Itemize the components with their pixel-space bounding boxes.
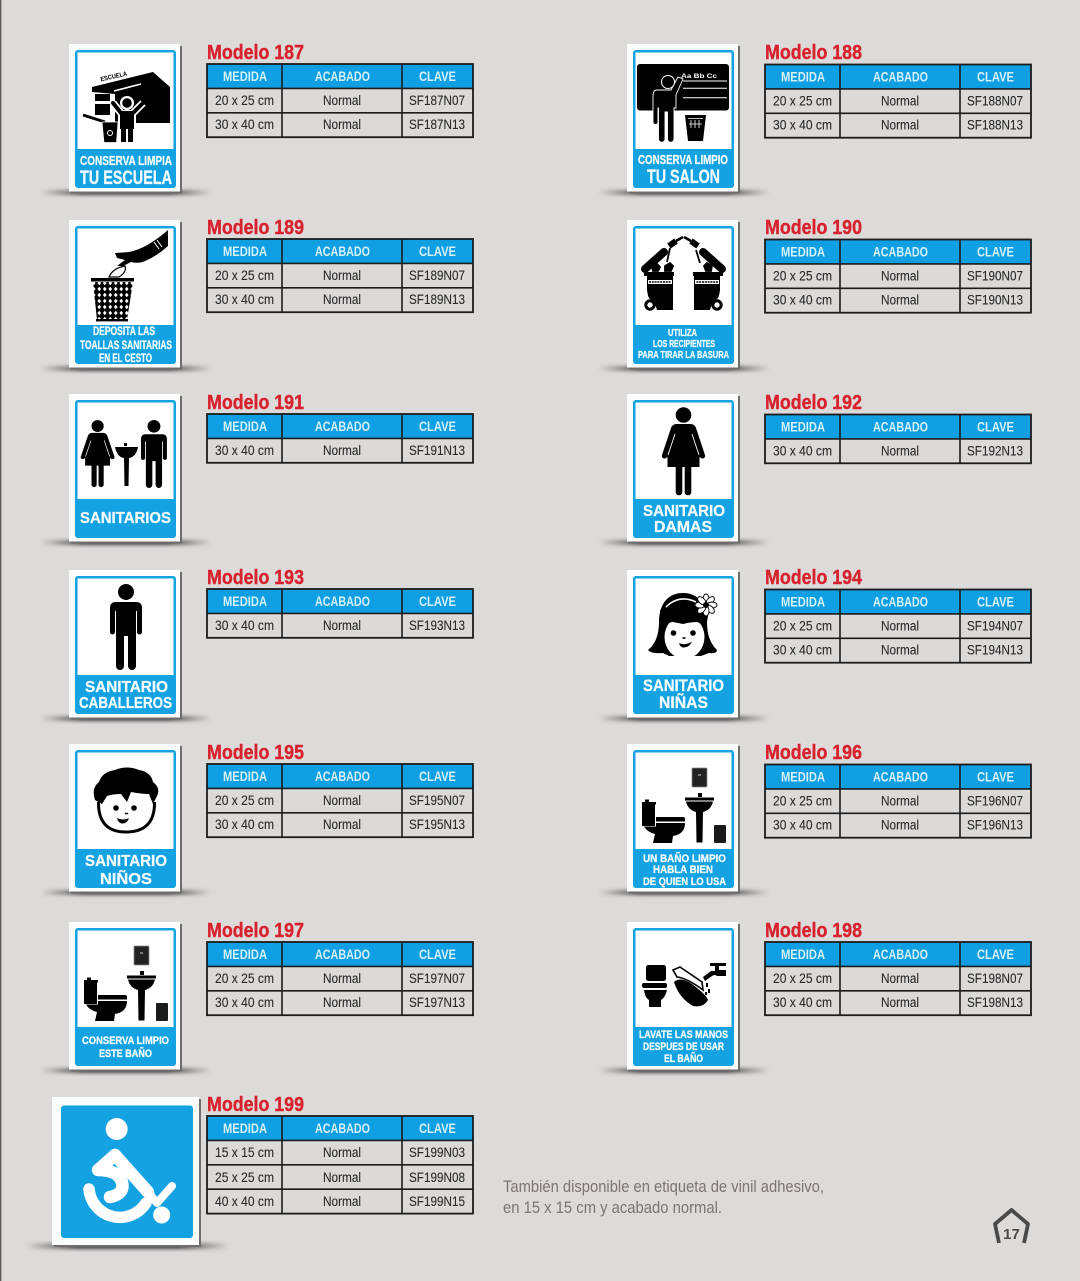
sign: sanitario caballeros: [40, 570, 212, 721]
table: modelo 190: MEDIDA: [781, 244, 825, 260]
table: modelo 193: 30 x 40 cm: [215, 618, 274, 633]
table: modelo 191: ACABADO: [315, 419, 370, 434]
heading: modelo 194: Modelo 194: [765, 567, 863, 589]
panel: modelo 192: [598, 392, 1031, 545]
table: modelo 193: Normal: [323, 618, 361, 633]
table: modelo 191: [207, 414, 473, 463]
icon: page number: [995, 1210, 1028, 1243]
table: modelo 196: 20 x 25 cm: [773, 794, 832, 808]
sign: un bano limpio: UN BAÑO LIMPIO: [643, 852, 726, 865]
table: modelo 194: 20 x 25 cm: [773, 618, 832, 634]
table: modelo 187: 20 x 25 cm: [215, 93, 274, 108]
table: modelo 197: 30 x 40 cm: [215, 995, 274, 1010]
table: modelo 187: ACABADO: [315, 69, 370, 84]
table: modelo 197: [207, 942, 473, 1015]
table: modelo 197: SF197N13: [409, 995, 465, 1010]
table: modelo 198: Normal: [881, 971, 919, 986]
sign: sanitario ninos: [40, 744, 212, 895]
table: modelo 187: CLAVE: [419, 69, 456, 84]
table: modelo 187: Normal: [323, 93, 361, 108]
heading: modelo 190: Modelo 190: [765, 217, 862, 239]
table: modelo 195: 30 x 40 cm: [215, 817, 274, 832]
table: modelo 199: SF199N15: [409, 1194, 465, 1209]
table: modelo 192: ACABADO: [873, 420, 928, 434]
table: modelo 195: Normal: [323, 817, 361, 832]
table: modelo 188: CLAVE: [977, 70, 1014, 84]
table: modelo 190: SF190N07: [967, 268, 1023, 284]
table: modelo 192: 30 x 40 cm: [773, 444, 832, 458]
table: modelo 199: 40 x 40 cm: [215, 1194, 274, 1209]
table: modelo 193: CLAVE: [419, 594, 456, 609]
sign: sanitario ninos: NIÑOS: [100, 868, 152, 888]
table: modelo 188: ACABADO: [873, 70, 928, 84]
table: modelo 199: [207, 1116, 473, 1214]
heading: modelo 188: Modelo 188: [765, 42, 862, 64]
table: modelo 187: 30 x 40 cm: [215, 117, 274, 132]
table: modelo 198: 20 x 25 cm: [773, 971, 832, 986]
sign: utiliza los recipientes: LOS RECIPIENTES: [653, 339, 715, 350]
table: modelo 198: CLAVE: [977, 947, 1014, 962]
table: modelo 192: [765, 414, 1031, 463]
table: modelo 196: MEDIDA: [781, 770, 825, 784]
sign: un bano limpio: [598, 744, 770, 895]
table: modelo 187: Normal: [323, 117, 361, 132]
sign: conserva limpia tu escuela: [40, 44, 212, 195]
table: modelo 189: SF189N07: [409, 268, 465, 283]
sign: lavate las manos: EL BAÑO: [664, 1052, 703, 1065]
sign: conserva limpia tu escuela: CONSERVA LIMPIA: [80, 153, 172, 168]
sign: sanitario ninas: NIÑAS: [659, 692, 708, 712]
table: modelo 189: Normal: [323, 268, 361, 283]
sign: sanitario damas: DAMAS: [654, 519, 712, 536]
sign: sanitario damas: [598, 394, 770, 545]
table: modelo 188: [765, 64, 1031, 138]
table: modelo 188: 30 x 40 cm: [773, 118, 832, 132]
heading: modelo 198: Modelo 198: [765, 920, 862, 942]
table: modelo 195: SF195N07: [409, 793, 465, 808]
table: modelo 195: CLAVE: [419, 769, 456, 784]
table: modelo 198: MEDIDA: [781, 947, 825, 962]
panel: modelo 189: [40, 217, 473, 371]
table: modelo 189: SF189N13: [409, 292, 465, 307]
sign: un bano limpio: HABLA BIEN: [653, 864, 713, 876]
table: modelo 191: Normal: [323, 443, 361, 458]
table: modelo 194: SF194N13: [967, 642, 1023, 658]
table: modelo 188: 20 x 25 cm: [773, 94, 832, 108]
table: modelo 187: MEDIDA: [223, 69, 267, 84]
sign: conserva limpio este bano: [40, 922, 212, 1073]
table: modelo 190: ACABADO: [873, 244, 928, 260]
sign: deposita las toallas sanitarias: EN EL CESTO: [99, 353, 152, 365]
table: modelo 191: SF191N13: [409, 443, 465, 458]
heading: modelo 193: Modelo 193: [207, 567, 304, 589]
sign: conserva limpia tu escuela: ESCUELA: [100, 70, 128, 83]
sign: sanitarios: SANITARIOS: [80, 510, 171, 527]
table: modelo 199: SF199N03: [409, 1145, 465, 1160]
table: modelo 188: MEDIDA: [781, 70, 825, 84]
sign: conserva limpio este bano: CONSERVA LIMPIO: [82, 1035, 169, 1047]
table: modelo 199: 25 x 25 cm: [215, 1170, 274, 1185]
table: modelo 198: SF198N13: [967, 995, 1023, 1010]
panel: modelo 197: [40, 920, 473, 1073]
sign: conserva limpia tu escuela: TU ESCUELA: [80, 168, 172, 189]
text block: vinyl label note: [503, 1177, 824, 1217]
panel: modelo 199: [25, 1094, 473, 1249]
heading: modelo 196: Modelo 196: [765, 742, 862, 764]
table: modelo 192: MEDIDA: [781, 420, 825, 434]
table: modelo 189: ACABADO: [315, 244, 370, 259]
table: modelo 190: Normal: [881, 268, 919, 284]
heading: modelo 197: Modelo 197: [207, 920, 304, 942]
sign: un bano limpio: DE QUIEN LO USA: [643, 876, 726, 888]
table: modelo 192: SF192N13: [967, 444, 1023, 458]
sign: conserva limpio tu salon: [598, 44, 770, 195]
table: modelo 194: Normal: [881, 642, 919, 658]
table: modelo 198: ACABADO: [873, 947, 928, 962]
table: modelo 194: MEDIDA: [781, 594, 825, 610]
table: modelo 189: 30 x 40 cm: [215, 292, 274, 307]
sign: conserva limpio tu salon: Aa Bb Cc: [681, 73, 717, 80]
sign: utiliza los recipientes: [598, 220, 770, 371]
table: modelo 189: MEDIDA: [223, 244, 267, 259]
table: modelo 193: [207, 589, 473, 638]
sign: deposita las toallas sanitarias: DEPOSITA LAS: [93, 326, 155, 338]
sign: conserva limpio tu salon: CONSERVA LIMPIO: [638, 152, 728, 167]
sign: sanitario ninas: SANITARIO: [643, 676, 724, 695]
table: modelo 190: 30 x 40 cm: [773, 292, 832, 308]
sign: conserva limpio este bano: ESTE BAÑO: [99, 1047, 152, 1060]
sign: sanitario caballeros: CABALLEROS: [79, 695, 172, 712]
table: modelo 197: 20 x 25 cm: [215, 971, 274, 986]
table: modelo 188: SF188N13: [967, 118, 1023, 132]
table: modelo 197: Normal: [323, 995, 361, 1010]
table: modelo 189: Normal: [323, 292, 361, 307]
sign: deposita las toallas sanitarias: TOALLAS SANITARIAS: [80, 340, 172, 352]
table: modelo 197: Normal: [323, 971, 361, 986]
heading: modelo 189: Modelo 189: [207, 217, 304, 239]
table: modelo 190: SF190N13: [967, 292, 1023, 308]
table: modelo 194: [765, 590, 1031, 663]
sign: sanitarios: [40, 394, 212, 545]
sign: sanitario caballeros: SANITARIO: [85, 679, 168, 696]
table: modelo 192: CLAVE: [977, 420, 1014, 434]
table: modelo 188: Normal: [881, 94, 919, 108]
table: modelo 197: SF197N07: [409, 971, 465, 986]
panel: modelo 187: [40, 42, 473, 195]
text block: vinyl label note: en 15 x 15 cm y acabado normal.: [503, 1198, 722, 1217]
table: modelo 188: SF188N07: [967, 94, 1023, 108]
table: modelo 187: [207, 64, 473, 137]
table: modelo 199: CLAVE: [419, 1121, 456, 1136]
table: modelo 189: [207, 239, 473, 312]
sign: sanitario damas: SANITARIO: [643, 503, 725, 520]
table: modelo 190: Normal: [881, 292, 919, 308]
table: modelo 191: MEDIDA: [223, 419, 267, 434]
panel: modelo 194: [598, 567, 1031, 721]
table: modelo 193: ACABADO: [315, 594, 370, 609]
table: modelo 189: 20 x 25 cm: [215, 268, 274, 283]
sign: lavate las manos: [598, 922, 770, 1073]
table: modelo 187: SF187N13: [409, 117, 465, 132]
panel: modelo 196: [598, 742, 1031, 895]
table: modelo 199: Normal: [323, 1194, 361, 1209]
table: modelo 197: CLAVE: [419, 947, 456, 962]
table: modelo 195: ACABADO: [315, 769, 370, 784]
table: modelo 189: CLAVE: [419, 244, 456, 259]
table: modelo 193: SF193N13: [409, 618, 465, 633]
table: modelo 191: 30 x 40 cm: [215, 443, 274, 458]
icon: page number: 17: [1003, 1226, 1020, 1243]
table: modelo 196: CLAVE: [977, 770, 1014, 784]
table: modelo 190: [765, 240, 1031, 313]
panel: modelo 193: [40, 567, 473, 721]
table: modelo 195: MEDIDA: [223, 769, 267, 784]
sign: deposita las toallas sanitarias: [40, 220, 212, 371]
table: modelo 194: ACABADO: [873, 594, 928, 610]
table: modelo 190: 20 x 25 cm: [773, 268, 832, 284]
heading: modelo 195: Modelo 195: [207, 742, 304, 764]
text block: vinyl label note: También disponible en etiqueta de vinil adhesivo,: [503, 1177, 824, 1196]
table: modelo 194: Normal: [881, 618, 919, 634]
table: modelo 195: Normal: [323, 793, 361, 808]
heading: modelo 199: Modelo 199: [207, 1094, 304, 1116]
heading: modelo 191: Modelo 191: [207, 392, 304, 414]
sign: sanitario ninos: SANITARIO: [85, 853, 167, 870]
table: modelo 196: Normal: [881, 794, 919, 808]
table: modelo 195: 20 x 25 cm: [215, 793, 274, 808]
table: modelo 196: 30 x 40 cm: [773, 818, 832, 832]
table: modelo 194: 30 x 40 cm: [773, 642, 832, 658]
table: modelo 192: Normal: [881, 444, 919, 458]
table: modelo 197: ACABADO: [315, 947, 370, 962]
table: modelo 199: MEDIDA: [223, 1121, 267, 1136]
sign: lavate las manos: LAVATE LAS MANOS: [639, 1029, 728, 1041]
table: modelo 198: [765, 942, 1031, 1015]
table: modelo 197: MEDIDA: [223, 947, 267, 962]
table: modelo 199: Normal: [323, 1145, 361, 1160]
table: modelo 195: SF195N13: [409, 817, 465, 832]
table: modelo 198: 30 x 40 cm: [773, 995, 832, 1010]
sign: sanitario ninas: [598, 570, 770, 721]
panel: modelo 191: [40, 392, 473, 545]
heading: modelo 192: Modelo 192: [765, 392, 862, 414]
table: modelo 199: Normal: [323, 1170, 361, 1185]
panel: modelo 188: [598, 42, 1031, 195]
table: modelo 196: [765, 764, 1031, 838]
table: modelo 199: SF199N08: [409, 1170, 465, 1185]
sign: utiliza los recipientes: UTILIZA: [668, 328, 697, 339]
heading: modelo 187: Modelo 187: [207, 42, 304, 64]
table: modelo 194: SF194N07: [967, 618, 1023, 634]
table: modelo 194: CLAVE: [977, 594, 1014, 610]
panel: modelo 198: [598, 920, 1031, 1073]
table: modelo 195: [207, 764, 473, 837]
table: modelo 196: ACABADO: [873, 770, 928, 784]
table: modelo 196: SF196N07: [967, 794, 1023, 808]
panel: modelo 190: [598, 217, 1031, 371]
sign: lavate las manos: DESPUES DE USAR: [643, 1041, 724, 1053]
sign: utiliza los recipientes: PARA TIRAR LA BASURA: [638, 350, 729, 361]
table: modelo 187: SF187N07: [409, 93, 465, 108]
panel: modelo 195: [40, 742, 473, 895]
table: modelo 190: CLAVE: [977, 244, 1014, 260]
table: modelo 198: SF198N07: [967, 971, 1023, 986]
table: modelo 191: CLAVE: [419, 419, 456, 434]
table: modelo 198: Normal: [881, 995, 919, 1010]
sign: conserva limpio tu salon: TU SALON: [647, 167, 720, 188]
table: modelo 196: SF196N13: [967, 818, 1023, 832]
table: modelo 196: Normal: [881, 818, 919, 832]
table: modelo 193: MEDIDA: [223, 594, 267, 609]
table: modelo 199: 15 x 15 cm: [215, 1145, 274, 1160]
table: modelo 188: Normal: [881, 118, 919, 132]
sign: accessibility symbol: [25, 1097, 230, 1249]
table: modelo 199: ACABADO: [315, 1121, 370, 1136]
